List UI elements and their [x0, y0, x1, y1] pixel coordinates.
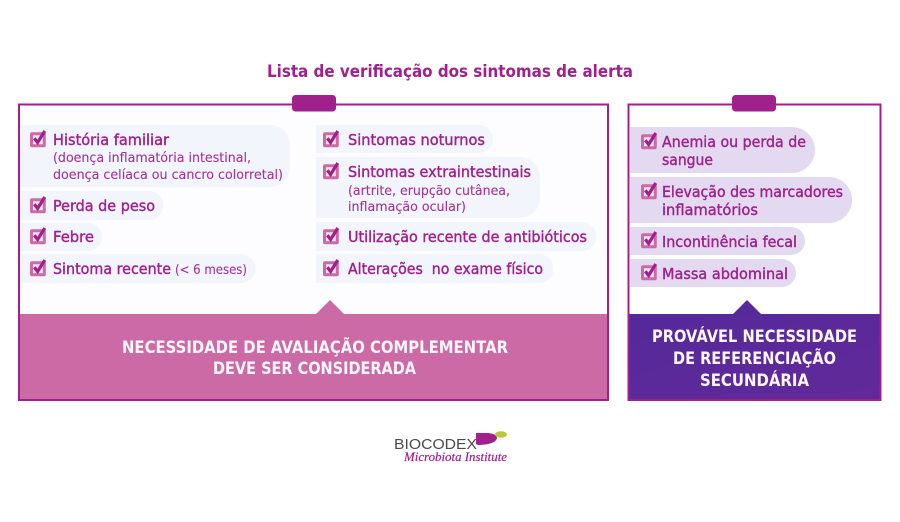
symptom: febre: Febre — [53, 228, 94, 246]
logo: Biocodex Microbiota Institute — [394, 431, 507, 464]
symptom: exame físico: Alterações no exame físico — [348, 260, 543, 278]
banner: avaliação complementar: NECESSIDADE DE AVALIAÇÃO COMPLEMENTAR — [122, 338, 508, 357]
arrow: purple pointer — [733, 300, 761, 314]
symptom: marcadores inflamatórios: Elevação des marcadores — [662, 183, 843, 201]
logo: Biocodex Microbiota Institute: BIOCODEX — [394, 437, 477, 453]
tab — [732, 95, 776, 112]
arrow: pink pointer — [316, 300, 344, 314]
symptom: sintomas noturnos — [316, 125, 493, 153]
symptom: marcadores inflamatórios: inflamatórios — [662, 201, 758, 219]
symptom: história familiar: doença celíaca ou cancro colorretal) — [53, 167, 283, 183]
symptom: antibióticos — [316, 222, 596, 251]
symptom: sintomas extraintestinais — [316, 157, 540, 218]
symptom: sintomas noturnos: Sintomas noturnos — [348, 131, 485, 149]
logo: Biocodex Microbiota Institute: Microbiota Institute — [403, 449, 507, 464]
symptom: perda de peso — [20, 191, 164, 220]
symptom: sintoma recente — [20, 254, 256, 283]
title: Lista de verificação dos sintomas de alerta — [267, 62, 633, 82]
symptom: sintoma recente: (< 6 meses) — [175, 262, 247, 278]
symptom: massa abdominal: Massa abdominal — [662, 265, 788, 283]
panel: referenciação secundária — [628, 95, 880, 400]
symptom: história familiar — [20, 125, 290, 187]
symptom: anemia — [630, 127, 815, 173]
banner: referenciação secundária — [630, 314, 880, 399]
symptom: massa abdominal — [630, 259, 796, 287]
symptom: antibióticos: Utilização recente de antibióticos — [348, 228, 587, 246]
banner: referenciação secundária: DE REFERENCIAÇÃO — [673, 349, 836, 368]
banner: avaliação complementar — [20, 314, 607, 399]
symptom: incontinência fecal: Incontinência fecal — [662, 233, 797, 251]
symptom: febre — [20, 223, 102, 251]
symptom: sintomas extraintestinais: inflamação ocular) — [348, 199, 466, 215]
symptom: sintomas extraintestinais: Sintomas extraintestinais — [348, 163, 531, 181]
panel: avaliação complementar — [19, 95, 608, 400]
symptom: sintoma recente: Sintoma recente — [53, 260, 171, 278]
symptom: perda de peso: Perda de peso — [53, 197, 155, 215]
tab — [292, 95, 336, 112]
symptom: anemia: Anemia ou perda de — [662, 133, 806, 151]
symptom: sintomas extraintestinais: (artrite, erupção cutânea, — [348, 183, 510, 199]
symptom: incontinência fecal — [630, 227, 805, 255]
symptom: história familiar: História familiar — [53, 131, 170, 149]
symptom: marcadores inflamatórios — [630, 177, 852, 223]
banner: avaliação complementar: DEVE SER CONSIDERADA — [213, 359, 416, 378]
banner: referenciação secundária: SECUNDÁRIA — [700, 371, 809, 390]
symptom: exame físico — [316, 254, 554, 283]
symptom: anemia: sangue — [662, 151, 713, 169]
banner: referenciação secundária: PROVÁVEL NECESSIDADE — [652, 327, 857, 346]
symptom: história familiar: (doença inflamatória intestinal, — [53, 150, 251, 166]
